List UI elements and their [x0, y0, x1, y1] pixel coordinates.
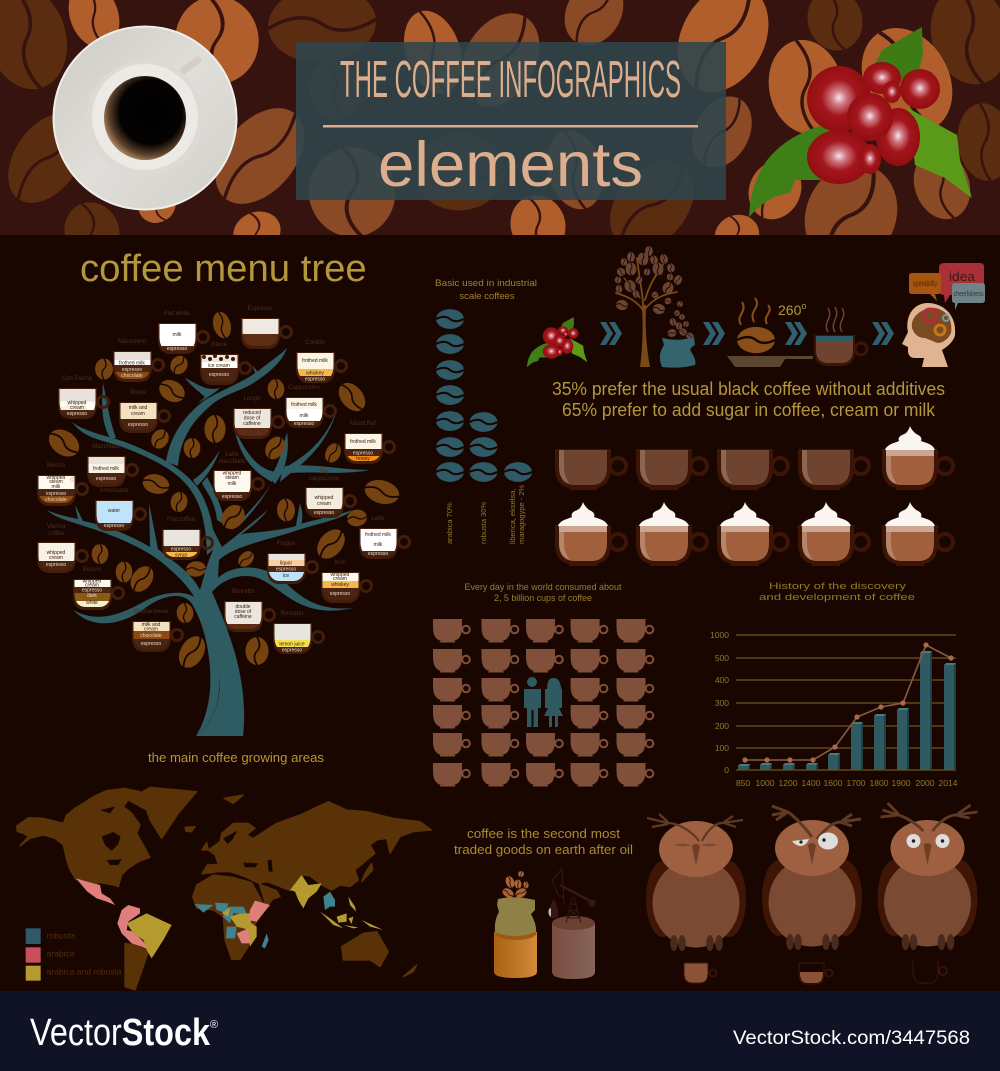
cup: Irish: Irish — [334, 560, 346, 566]
arrow — [600, 322, 622, 345]
text: daily consumption: Every day in the world consumed about — [464, 582, 622, 593]
grid lines — [736, 635, 956, 770]
South East Asia robusta — [323, 892, 335, 910]
cup: Mocha breve: espresso — [141, 641, 161, 647]
cup: Marochino: chocolate — [121, 373, 143, 379]
y axis labels: 100 — [715, 743, 729, 753]
cup: Vienna coffee: cream — [49, 555, 63, 561]
x axis labels: 1600 — [824, 778, 843, 788]
coffee cup on saucer — [52, 26, 238, 210]
process: human head with gears — [902, 303, 955, 367]
vertical labels: maragogype - 2% — [517, 484, 526, 544]
cup: Flat white — [158, 311, 208, 354]
cup: Glace: Glace — [211, 342, 227, 348]
process: roasting bean and pan — [727, 298, 813, 367]
speech bubble: idea: idea — [949, 269, 976, 284]
cup: Ristretto: caffeine — [234, 614, 252, 620]
cup: Con Panna: Con Panna — [62, 376, 93, 382]
combo chart: history of coffee — [710, 630, 958, 788]
cup: Mood Raf: Mood Raf — [350, 421, 376, 427]
cup: Frappe: ice — [283, 573, 289, 579]
cup: Glace: ice cream — [208, 363, 230, 369]
chart heading: Basic used in industrial — [435, 278, 537, 289]
cups row: coffee with cream — [555, 502, 953, 566]
coffee sack on orange cylinder — [494, 871, 537, 978]
vertical labels: liberica, ekselsa, — [508, 489, 517, 544]
cup: Macchiato: Macchiato — [92, 444, 120, 450]
cup: Macchiato: frothed milk — [93, 466, 119, 472]
cup: Con Panna: espresso — [67, 411, 87, 417]
cup: Latte: espresso — [368, 551, 388, 557]
cup: Marochino: espresso — [122, 367, 142, 373]
map legend: arabica and robusta — [47, 967, 122, 977]
cup: Lungo: reduced — [243, 410, 261, 416]
text: coffee preference statistic — [552, 379, 945, 420]
cup: Latte macchiato: macchiato — [218, 459, 246, 465]
cup: Bicerin: cream — [85, 582, 99, 588]
brows and tufts — [880, 803, 978, 831]
cup: Espresso: Espresso — [247, 306, 273, 312]
closed eyes — [674, 844, 717, 846]
continents — [17, 787, 432, 990]
cups grid pictogram — [433, 619, 653, 786]
tree coffee beans — [44, 310, 402, 672]
cup: Mocha breve: Mocha breve — [134, 609, 169, 615]
VectorStock logo: VectorStock — [30, 1012, 211, 1054]
x axis labels: 1000 — [756, 778, 775, 788]
cup: Americano: water — [108, 508, 120, 514]
cup: Breve — [119, 390, 170, 433]
South America arabica and robusta — [127, 913, 172, 958]
cup: Breve: espresso — [128, 422, 148, 428]
cup: Romano: espresso — [282, 648, 302, 654]
process: coffee sack — [660, 301, 695, 368]
icon: man — [524, 677, 541, 727]
India — [290, 875, 322, 908]
cup: Latte macchiato — [213, 452, 264, 501]
cup: Bicerin: Bicerin — [83, 567, 101, 573]
cup: Irish: whiskey — [331, 582, 349, 588]
cup: Lungo: Lungo — [244, 396, 261, 402]
cup: Americano: espresso — [104, 523, 124, 529]
speech bubble: idea — [939, 263, 984, 303]
cup: Dry cappuccino: cream — [317, 501, 331, 507]
world map — [17, 787, 432, 990]
cup: Latte macchiato: espresso — [222, 494, 242, 500]
chart title — [759, 581, 915, 603]
cup: Vienna coffee: espresso — [46, 562, 66, 568]
owl: wide awake — [878, 803, 978, 950]
coffee berries branch — [749, 27, 972, 217]
cup: Latte macchiato: Latte — [225, 452, 239, 458]
cup: Corette: whiskey — [306, 370, 324, 376]
arrow — [703, 322, 725, 345]
heading: coffee menu tree: coffee menu tree — [80, 247, 367, 290]
roasting temperature label: 260 — [778, 302, 801, 318]
Africa robusta — [194, 903, 247, 938]
cup: Vienna coffee: whipped — [47, 550, 66, 556]
cup: Con Panna — [58, 376, 108, 419]
y axis labels: 200 — [715, 721, 729, 731]
cup: Americano: Americano — [100, 488, 129, 494]
brows and tufts — [772, 806, 861, 839]
chart title: and development of coffee — [759, 592, 915, 603]
footer band — [0, 991, 1000, 1071]
cup: Dry cappuccino: Dry — [319, 469, 329, 475]
x axis labels: 850 — [736, 778, 750, 788]
cups row: black coffee and cream — [555, 426, 953, 490]
heading: growing areas: the main coffee growing areas — [148, 751, 324, 765]
cup: half, owl squinting — [799, 963, 832, 984]
cup: Ristretto: double — [235, 604, 251, 610]
cup: Irish — [321, 560, 372, 603]
subtitle: elements — [378, 130, 643, 200]
cup: Dry cappuccino: whipped — [315, 495, 334, 501]
y axis labels: 500 — [715, 653, 729, 663]
vertical labels: robusta 30% — [479, 502, 488, 544]
cup: Mocha: chocolate — [45, 497, 67, 503]
chart title: History of the discovery — [769, 581, 906, 592]
text: coffee preference statistic: 35% prefer the usual black coffee without additives — [552, 379, 945, 399]
brows and tufts — [647, 814, 743, 841]
cup: Espresso — [241, 306, 292, 349]
cup: Mocha breve: chocolate — [140, 633, 162, 639]
cup: Cappuccino: frothed milk — [291, 402, 317, 408]
seas and lakes — [100, 807, 273, 872]
footer band: ® — [210, 1019, 218, 1031]
process: small bean tree — [615, 246, 684, 367]
y axis labels — [710, 630, 729, 775]
Central America arabica — [76, 878, 115, 905]
cup: Irish: espresso — [330, 591, 350, 597]
cup: Marochino: Marochino — [118, 339, 147, 345]
cup: Dry cappuccino: cappuccino — [309, 476, 340, 482]
cup: Mocha breve: cream — [144, 626, 158, 632]
cup: Con Panna: cream — [70, 405, 84, 411]
cup: Frappe: liquor — [280, 560, 292, 566]
cup: Latte: Latte — [371, 516, 385, 522]
speech bubble: cheerfulness: cheerfulness — [954, 289, 984, 298]
x axis labels: 1200 — [779, 778, 798, 788]
x axis labels — [736, 778, 958, 788]
cup: Breve: cream — [131, 411, 145, 417]
map legend: robusta — [47, 930, 75, 940]
cup: Americano — [95, 488, 146, 531]
process: cup with steam — [814, 307, 867, 366]
cup: Mood Raf: honey — [356, 456, 370, 462]
cup: Bicerin: espresso — [82, 588, 102, 594]
cup: Mocha: milk — [52, 484, 61, 490]
bar tops — [738, 651, 956, 766]
cup: Glace: espresso — [209, 372, 229, 378]
cup: Ristretto: dose of — [235, 609, 252, 615]
cup: Macchiato: espresso — [96, 476, 116, 482]
x axis labels: 1800 — [870, 778, 889, 788]
cup: Mocha: steam — [49, 479, 63, 485]
cup: Frappe: Frappe — [276, 541, 296, 547]
cup: Irish: whipped — [331, 572, 350, 578]
cup: Latte macchiato: milk — [228, 481, 237, 487]
image id: VectorStock.com/3447568 — [733, 1027, 970, 1049]
cup: Corette — [296, 340, 346, 383]
text: second most traded: traded goods on earth after oil — [454, 842, 633, 857]
bean species chart: scale coffees — [459, 291, 515, 302]
speech bubble: cheerfulness — [952, 283, 985, 310]
line series — [745, 645, 951, 760]
x axis labels: 1900 — [892, 778, 911, 788]
cup: Breve: Breve — [130, 390, 146, 396]
cup: Breve: milk and — [129, 405, 148, 411]
cup: Romano — [273, 611, 324, 654]
Africa arabica — [237, 901, 270, 943]
speech bubble: operability: operability — [913, 279, 937, 288]
x axis labels: 1400 — [802, 778, 821, 788]
cup: Lungo: dose of — [244, 416, 261, 422]
text: coffee preference statistic: 65% prefer to add sugar in coffee, cream or milk — [562, 400, 936, 420]
oil drop — [549, 899, 558, 918]
bar sides — [748, 651, 956, 770]
cup: Dry cappuccino — [305, 469, 356, 518]
cup: Cappuccino: Cappuccino — [288, 385, 321, 391]
cup: Con Panna: whipped — [68, 400, 87, 406]
vertical labels: arabica 70% — [445, 502, 454, 544]
cup: Latte — [359, 516, 410, 559]
cup: Ristretto — [224, 589, 274, 632]
Indonesia and Philippines — [320, 897, 383, 930]
speech bubble: operability — [909, 273, 941, 301]
cup: Latte: frothed milk — [365, 532, 391, 538]
cup: Marochino — [113, 339, 164, 382]
cup: Frappe: espresso — [276, 566, 296, 572]
South America arabica — [117, 905, 148, 950]
cup: Corette: frothed milk — [302, 358, 328, 364]
cup: Mocha: Mocha — [47, 463, 66, 469]
cup: Dry cappuccino: espresso — [314, 510, 334, 516]
cup: Corette: espresso — [305, 376, 325, 382]
coffee tree trunk and branches — [47, 348, 370, 736]
roasting temperature label: o — [801, 301, 806, 311]
cup: Flat coffee: espresso — [171, 546, 191, 552]
cup: Latte macchiato: whipped — [223, 470, 242, 476]
cup: Latte macchiato: steam — [225, 475, 239, 481]
text: daily consumption — [464, 582, 622, 604]
owl: sleeping — [646, 814, 746, 951]
cup: Marochino: frothed milk — [119, 360, 145, 366]
cup: Irish: cream — [333, 576, 347, 582]
cup: Mood Raf: frothed milk — [350, 439, 376, 445]
oil barrel with derrick — [548, 869, 596, 979]
cup: Vienna coffee — [37, 524, 88, 573]
right eye — [818, 832, 838, 850]
cup: Bicerin: white — [86, 600, 98, 606]
cup: Romano: Romano — [281, 611, 304, 617]
x axis labels: 2014 — [939, 778, 958, 788]
pictogram bean columns — [436, 309, 532, 482]
cup: Romano: lemon juice — [279, 642, 305, 648]
cup: Vienna coffee: coffee — [48, 531, 65, 537]
icon: woman — [544, 678, 563, 727]
cup: Flat white: Flat white — [164, 311, 190, 317]
cup: Flat white: milk — [173, 332, 182, 338]
cup: Flat coffee — [162, 517, 212, 560]
y axis labels: 400 — [715, 675, 729, 685]
cup: Mocha breve — [132, 609, 182, 652]
cup: Vienna coffee: Vienna — [47, 524, 66, 530]
text: second most traded — [454, 826, 633, 857]
left eye — [792, 839, 809, 846]
cup: Mood Raf — [344, 421, 394, 464]
cup: Mocha: espresso — [46, 491, 66, 497]
x axis labels: 1700 — [847, 778, 866, 788]
Africa arabica and robusta — [222, 907, 257, 947]
cup: Mood Raf: espresso — [353, 450, 373, 456]
cup: Ristretto: Ristretto — [232, 589, 255, 595]
text: daily consumption: 2, 5 billion cups of coffee — [494, 593, 592, 604]
y axis labels: 300 — [715, 698, 729, 708]
cup: full, owl sleeping — [684, 963, 716, 983]
coffee beans pattern — [0, 0, 1000, 235]
cup: Lungo — [233, 396, 284, 439]
cup: Bicerin — [73, 567, 124, 610]
text: second most traded: coffee is the second most — [467, 826, 620, 841]
cup: Cappuccino: milk — [300, 413, 309, 419]
cup: Glace — [200, 342, 250, 385]
Madagascar — [262, 933, 269, 948]
process: berries — [527, 317, 587, 367]
cup: Mocha breve: milk and — [142, 622, 161, 628]
cup: empty, owl awake — [913, 961, 947, 983]
map legend: arabica — [47, 949, 75, 959]
cup: Flat coffee: syrup — [175, 552, 187, 558]
bars — [738, 653, 954, 770]
header banner — [0, 0, 1000, 235]
arrow — [785, 322, 807, 345]
map legend — [26, 928, 122, 981]
eyes — [906, 834, 920, 848]
cup: Latte: milk — [374, 542, 383, 548]
cup: Bicerin: dark — [87, 593, 97, 599]
cup: Flat coffee: Flat coffee — [167, 517, 196, 523]
vertical labels — [445, 484, 526, 544]
bean species chart — [435, 278, 537, 544]
cup: Corette: Corette — [305, 340, 325, 346]
cup: Cappuccino — [285, 385, 336, 428]
cup: Macchiato — [87, 444, 138, 487]
y axis labels: 1000 — [710, 630, 729, 640]
arrow — [872, 322, 894, 345]
line markers — [742, 642, 954, 763]
cup: Lungo: caffeine — [243, 421, 261, 427]
cup: Mocha — [37, 463, 88, 506]
x axis labels: 2000 — [916, 778, 935, 788]
cup: Flat white: espresso — [167, 346, 187, 352]
owl: one eye open — [762, 806, 862, 950]
title panel — [296, 42, 726, 200]
cup: Mocha: whipped — [47, 475, 66, 481]
y axis labels: 0 — [724, 765, 729, 775]
cup: Frappe — [267, 541, 318, 584]
cup: Bicerin: whipped — [83, 578, 102, 584]
cup: Cappuccino: espresso — [294, 421, 314, 427]
